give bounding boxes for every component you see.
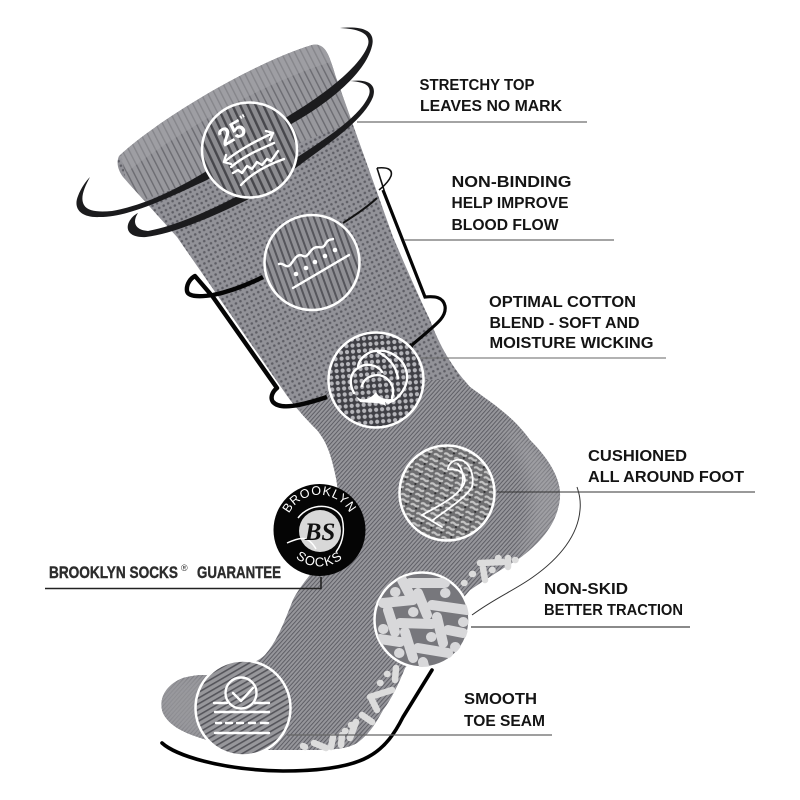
brooklyn socks logo bbox=[274, 484, 366, 576]
icon: 25 inch stretch: " bbox=[237, 111, 250, 127]
label: brooklyn socks guarantee bbox=[49, 563, 281, 582]
thin traction curve bbox=[472, 487, 580, 615]
label: brooklyn socks guarantee: ® bbox=[181, 563, 188, 573]
label: cushioned: CUSHIONED bbox=[588, 448, 687, 465]
label: cushioned bbox=[588, 448, 744, 486]
label: stretchy top bbox=[420, 77, 562, 115]
icon: grip pattern bbox=[380, 580, 467, 670]
icon: 25 inch stretch bbox=[213, 111, 284, 185]
label: non-skid: NON-SKID bbox=[544, 581, 628, 598]
sock body bbox=[118, 44, 560, 750]
label: non-skid bbox=[544, 581, 683, 619]
label: smooth toe seam bbox=[464, 691, 545, 730]
badge: cushioned bbox=[400, 446, 494, 540]
logo emblem: BS bbox=[304, 519, 335, 546]
badge: 25 inch stretchy top bbox=[202, 102, 297, 198]
label: optimal cotton: OPTIMAL COTTON bbox=[489, 294, 636, 311]
brooklyn socks logo: SOCKS bbox=[296, 552, 342, 566]
icon: 25 inch stretch: 25 bbox=[213, 114, 251, 152]
icon: cotton boll bbox=[351, 351, 407, 406]
label: non-binding: BLOOD FLOW bbox=[452, 217, 559, 234]
badge: cotton bbox=[328, 332, 424, 428]
label: non-binding: HELP IMPROVE bbox=[452, 195, 569, 212]
icon: toe seam check bbox=[214, 678, 269, 733]
icon: feather bbox=[422, 460, 473, 527]
sock bbox=[118, 44, 560, 752]
label: optimal cotton: BLEND - SOFT AND bbox=[490, 315, 640, 332]
brooklyn socks logo: BROOKLYN bbox=[282, 486, 356, 513]
badge: smooth toe seam bbox=[196, 660, 290, 756]
black bracket ring around leg bbox=[187, 168, 445, 406]
label: brooklyn socks guarantee: BROOKLYN SOCKS bbox=[49, 564, 178, 582]
leader lines bbox=[45, 122, 755, 735]
label: optimal cotton bbox=[489, 294, 654, 352]
compression ring: top band 1 bbox=[76, 28, 373, 217]
label: smooth toe seam: TOE SEAM bbox=[464, 713, 545, 730]
label: stretchy top: STRETCHY TOP bbox=[420, 77, 535, 94]
label: smooth toe seam: SMOOTH bbox=[464, 691, 537, 708]
badge: non-binding bbox=[264, 215, 360, 310]
label: cushioned: ALL AROUND FOOT bbox=[588, 469, 744, 486]
label: non-skid: BETTER TRACTION bbox=[544, 602, 683, 619]
badge: non-skid bbox=[374, 572, 470, 670]
label: optimal cotton: MOISTURE WICKING bbox=[490, 335, 654, 352]
label: stretchy top: LEAVES NO MARK bbox=[420, 98, 562, 115]
label: non-binding bbox=[452, 174, 572, 234]
icon: wave and dots above line bbox=[279, 239, 349, 288]
non-skid grip dots on sole bbox=[303, 558, 516, 748]
compression ring: top band 2 bbox=[128, 81, 374, 237]
sole outline curve bbox=[162, 670, 432, 771]
label: brooklyn socks guarantee: GUARANTEE bbox=[197, 564, 281, 582]
label: non-binding: NON-BINDING bbox=[452, 174, 572, 191]
